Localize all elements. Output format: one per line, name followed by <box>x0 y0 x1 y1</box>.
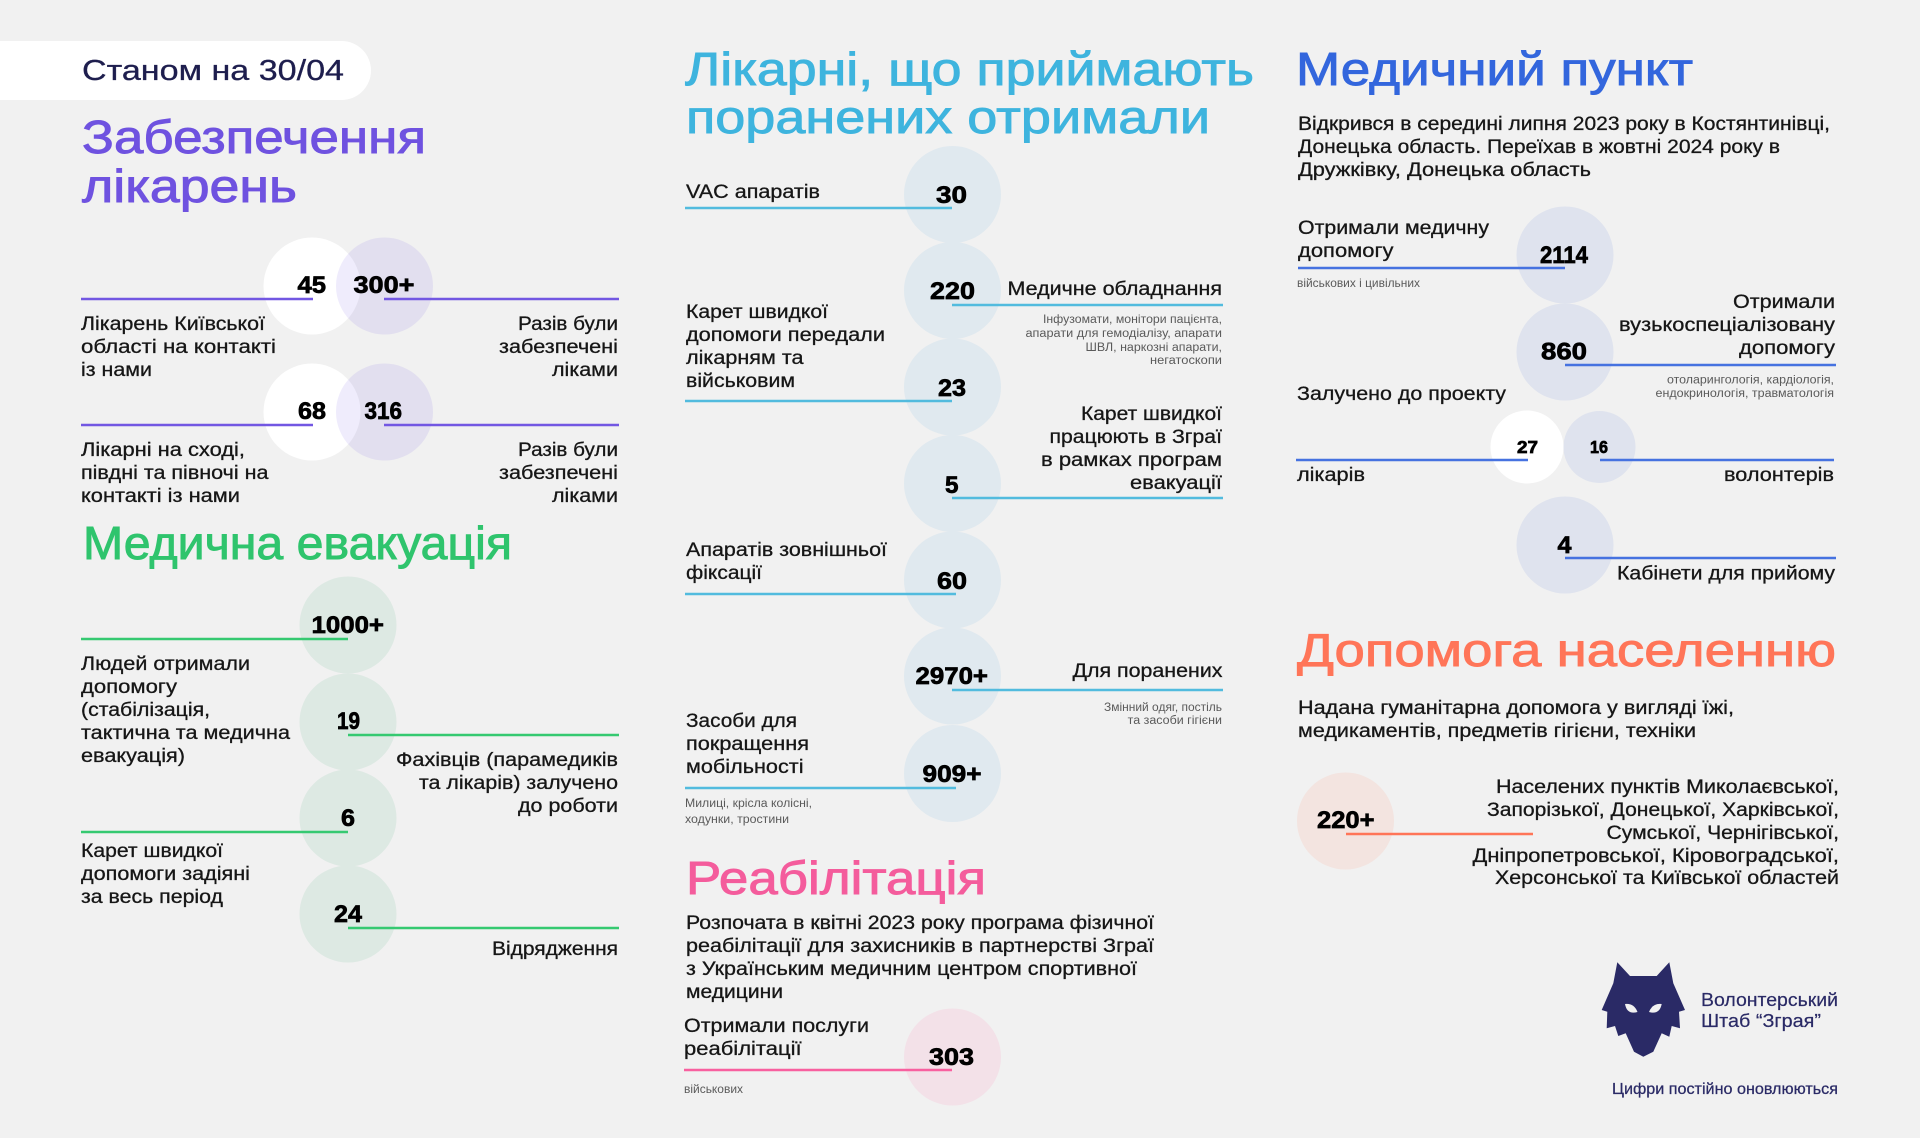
stat: 30 VAC devices <box>685 146 1001 243</box>
stat: 68 hospitals: 68 <box>298 398 326 425</box>
stat: 860 specialised care: допомогу <box>1739 337 1835 359</box>
panel: medical evacuation <box>81 517 619 962</box>
stat: 909+ mobility aids: ходунки, тростини <box>685 814 789 826</box>
stat: 6 ambulances: 6 <box>341 805 355 832</box>
stat: 303 rehabilitated <box>684 1008 1001 1106</box>
text: rehabilitation description: реабілітації для захисників в партнерстві Зграї <box>686 935 1155 957</box>
stat: 303 rehabilitated: 303 <box>929 1044 974 1071</box>
stat: 16 volunteers: 16 <box>1590 437 1608 457</box>
stat: 27 doctors <box>1296 410 1564 486</box>
stat: 45 hospitals: області на контакті <box>81 336 276 358</box>
stat: 2114 received aid: 2114 <box>1540 242 1589 269</box>
stat: 909+ mobility aids: покращення <box>686 733 809 755</box>
stat: 5 evacuation ambulances: в рамках програм <box>1041 449 1222 471</box>
stat: 303 rehabilitated: Отримали послуги <box>684 1015 869 1037</box>
stat: 23 ambulances handed over: 23 <box>938 375 966 402</box>
stat: 909+ mobility aids <box>685 710 1001 826</box>
stat: 316 supplies: Разів були <box>518 439 618 461</box>
stat: 220 medical equipment: Медичне обладнання <box>1008 278 1222 300</box>
date badge: Станом на 30/04 <box>82 55 344 87</box>
panel: rehabilitation <box>684 852 1155 1106</box>
stat: 60 external fixation devices <box>685 532 1001 628</box>
stat: 60 external fixation devices: фіксації <box>686 562 763 584</box>
heading: medical evacuation: Медична евакуація <box>83 517 512 569</box>
stat: 1000+ people: (стабілізація, <box>81 699 210 721</box>
stat: 909+ mobility aids: 909+ <box>922 761 982 788</box>
stat: 19 specialists <box>300 674 619 817</box>
stat: 6 ambulances: допомоги задіяні <box>81 863 250 885</box>
stat: 860 specialised care: 860 <box>1541 338 1587 366</box>
stat: 19 specialists: 19 <box>337 708 360 735</box>
stat: 23 ambulances handed over: військовим <box>686 370 795 392</box>
stat: 6 ambulances: Карет швидкої <box>81 840 224 862</box>
text: organisation name: Штаб “Зграя” <box>1701 1011 1821 1031</box>
logo: volunteer headquarters Zgraya <box>1602 962 1838 1057</box>
stat: 60 external fixation devices: 60 <box>937 568 967 595</box>
stat: 24 deployments: Відрядження <box>492 938 618 960</box>
stat: 909+ mobility aids: мобільності <box>686 756 804 778</box>
stat: 5 evacuation ambulances: 5 <box>945 472 958 499</box>
stat: 860 specialised care: вузькоспеціалізовану <box>1619 314 1835 336</box>
stat: 2970+ for wounded <box>904 628 1223 727</box>
stat: 19 specialists: Фахівців (парамедиків <box>396 749 618 771</box>
stat: 30 VAC devices: 30 <box>936 182 967 209</box>
stat: 45 hospitals: Лікарень Київської <box>81 313 266 335</box>
stat: 68 hospitals <box>81 364 360 507</box>
stat: 19 specialists: до роботи <box>518 795 618 817</box>
text: rehabilitation description: Розпочата в квітні 2023 року програма фізичної <box>686 912 1155 934</box>
stat: 220 medical equipment: 220 <box>930 278 975 305</box>
stat: 5 evacuation ambulances: евакуації <box>1130 472 1223 494</box>
stat: 45 hospitals <box>81 238 360 381</box>
text: aid description <box>1298 697 1734 742</box>
stat: 2970+ for wounded: та засоби гігієни <box>1128 715 1222 727</box>
heading: hospital supply: лікарень <box>82 160 297 212</box>
text: organisation name: Волонтерський <box>1701 990 1838 1010</box>
stat: 909+ mobility aids: Милиці, крісла колісні, <box>685 798 812 810</box>
stat: 23 ambulances handed over: лікарням та <box>686 347 804 369</box>
stat: 860 specialised care: отоларингологія, кардіологія, <box>1667 374 1834 386</box>
panel: hospitals receiving wounded <box>685 43 1254 826</box>
text: involved in project: Залучено до проекту <box>1297 383 1506 405</box>
stat: 45 hospitals: із нами <box>81 359 152 381</box>
text: medical point description <box>1298 113 1830 181</box>
stat: 6 ambulances <box>81 770 396 908</box>
stat: 860 specialised care: ендокринологія, травматологія <box>1656 388 1834 400</box>
stat: 220+ settlements: Населених пунктів Миколаєвської, <box>1496 776 1839 798</box>
stat: 2114 received aid <box>1297 206 1614 304</box>
stat: 4 consulting rooms: Кабінети для прийому <box>1617 562 1835 584</box>
text: medical point description: Донецька область. Переїхав в жовтні 2024 року в <box>1298 136 1780 158</box>
stat: 220+ settlements: Херсонської та Київської областей <box>1495 867 1839 889</box>
stat: 19 specialists: та лікарів) залучено <box>419 772 618 794</box>
stat: 303 rehabilitated: військових <box>684 1084 743 1096</box>
text: rehabilitation description: медицини <box>686 981 783 1003</box>
stat: 316 supplies: ліками <box>552 485 618 507</box>
stat: 5 evacuation ambulances <box>904 403 1223 532</box>
panel: aid to population <box>1297 624 1839 889</box>
heading: rehabilitation: Реабілітація <box>686 852 986 904</box>
stat: 220+ settlements: Сумської, Чернігівської, <box>1606 822 1839 844</box>
stat: 1000+ people: 1000+ <box>312 612 384 639</box>
text: rehabilitation description <box>686 912 1155 1003</box>
stat: 16 volunteers: волонтерів <box>1724 464 1834 486</box>
stat: 4 consulting rooms <box>1516 496 1836 594</box>
stat: 24 deployments: 24 <box>334 901 363 928</box>
stat: 300+ supplies: забезпечені <box>499 336 618 358</box>
heading: hospitals receiving wounded <box>685 43 1254 143</box>
stat: 1000+ people: евакуація) <box>81 745 185 767</box>
stat: 68 hospitals: контакті із нами <box>81 485 240 507</box>
footnote: Цифри постійно оновлюються <box>1612 1081 1838 1098</box>
stat: 30 VAC devices: VAC апаратів <box>686 181 820 203</box>
stat: 2970+ for wounded: 2970+ <box>916 663 988 690</box>
stat: 300+ supplies: 300+ <box>354 272 414 299</box>
heading: aid to population: Допомога населенню <box>1297 624 1836 676</box>
text: aid description: Надана гуманітарна допомога у вигляді їжі, <box>1298 697 1734 719</box>
text: rehabilitation description: з Українським медичним центром спортивної <box>686 958 1138 980</box>
text: medical point description: Дружківку, Донецька область <box>1298 159 1591 181</box>
heading: hospitals receiving wounded: поранених отримали <box>686 91 1210 143</box>
stat: 16 volunteers <box>1564 411 1834 486</box>
heading: hospital supply <box>82 111 426 212</box>
stat: 220 medical equipment: негатоскопи <box>1150 355 1222 367</box>
text: organisation name <box>1701 990 1838 1031</box>
text: medical point description: Відкрився в середині липня 2023 року в Костянтинівці, <box>1298 113 1830 135</box>
stat: 220 medical equipment: апарати для гемодіалізу, апарати <box>1026 328 1222 340</box>
stat: 220+ settlements: Дніпропетровської, Кіровоградської, <box>1472 845 1839 867</box>
stat: 2970+ for wounded: Для поранених <box>1072 660 1223 682</box>
stat: 220 medical equipment: Інфузомати, монітори пацієнта, <box>1043 314 1222 326</box>
stat: 303 rehabilitated: реабілітації <box>684 1038 802 1060</box>
heading: hospital supply: Забезпечення <box>82 111 426 163</box>
heading: hospitals receiving wounded: Лікарні, що приймають <box>685 43 1254 95</box>
stat: 60 external fixation devices: Апаратів зовнішньої <box>686 539 888 561</box>
stat: 68 hospitals: Лікарні на сході, <box>81 439 245 461</box>
text: aid description: медикаментів, предметів гігієни, техніки <box>1298 720 1696 742</box>
stat: 2970+ for wounded: Змінний одяг, постіль <box>1104 702 1222 714</box>
stat: 220+ settlements: 220+ <box>1317 807 1374 834</box>
stat: 316 supplies: 316 <box>364 398 402 425</box>
stat: 316 supplies <box>336 364 619 507</box>
date badge <box>0 41 371 100</box>
stat: 220 medical equipment <box>904 242 1223 367</box>
stat: 4 consulting rooms: 4 <box>1558 532 1572 559</box>
stat: 1000+ people: допомогу <box>81 676 177 698</box>
stat: 2114 received aid: допомогу <box>1298 240 1394 262</box>
stat: 220 medical equipment: ШВЛ, наркозні апарати, <box>1086 342 1222 354</box>
stat: 1000+ people <box>81 576 396 767</box>
stat: 316 supplies: забезпечені <box>499 462 618 484</box>
stat: 220+ settlements <box>1297 772 1839 889</box>
stat: 5 evacuation ambulances: працюють в Зграї <box>1050 426 1223 448</box>
stat: 45 hospitals: 45 <box>298 272 326 299</box>
stat: 860 specialised care: Отримали <box>1733 291 1835 313</box>
stat: 1000+ people: Людей отримали <box>81 653 250 675</box>
stat: 300+ supplies <box>336 238 619 381</box>
stat: 2114 received aid: військових і цивільних <box>1297 278 1420 290</box>
stat: 27 doctors: лікарів <box>1297 464 1365 486</box>
stat: 68 hospitals: півдні та півночі на <box>81 462 269 484</box>
stat: 27 doctors: 27 <box>1517 437 1538 457</box>
stat: 24 deployments <box>300 866 619 962</box>
stat: 300+ supplies: Разів були <box>518 313 618 335</box>
icon: wolf head <box>1602 962 1685 1057</box>
stat: 23 ambulances handed over: допомоги передали <box>686 324 885 346</box>
stat: 6 ambulances: за весь період <box>81 886 224 908</box>
stat: 1000+ people: тактична та медична <box>81 722 290 744</box>
stat: 23 ambulances handed over <box>685 301 1001 436</box>
heading: medical point: Медичний пункт <box>1296 43 1693 95</box>
stat: 23 ambulances handed over: Карет швидкої <box>686 301 829 323</box>
stat: 909+ mobility aids: Засоби для <box>686 710 797 732</box>
panel: hospital supply <box>81 111 619 507</box>
stat: 220+ settlements: Запорізької, Донецької, Харківської, <box>1487 799 1839 821</box>
stat: 300+ supplies: ліками <box>552 359 618 381</box>
panel: medical point <box>1296 43 1836 594</box>
stat: 5 evacuation ambulances: Карет швидкої <box>1081 403 1223 425</box>
stat: 860 specialised care <box>1516 291 1836 400</box>
stat: 2114 received aid: Отримали медичну <box>1298 217 1489 239</box>
